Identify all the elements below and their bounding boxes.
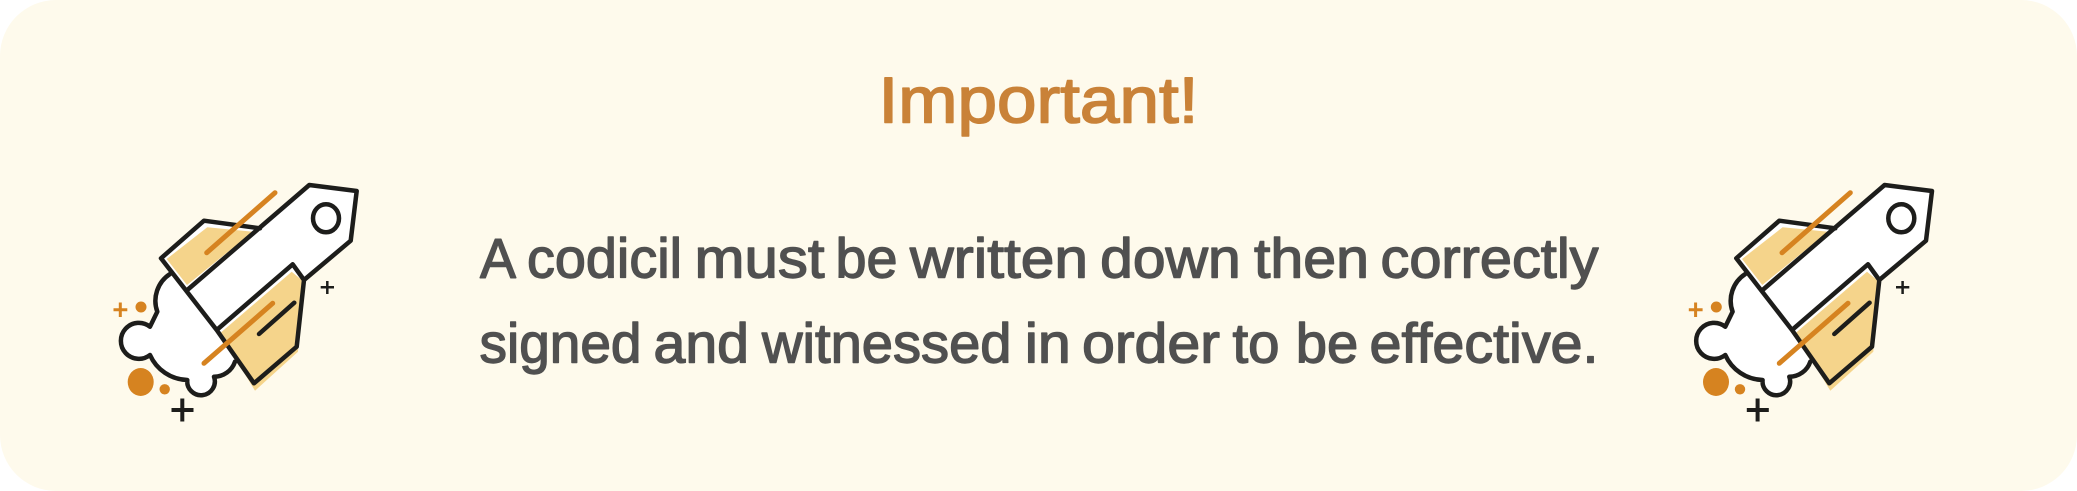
body text: be (1296, 312, 1358, 375)
body text: to (1232, 312, 1280, 375)
icon: right rocket (1689, 185, 1932, 422)
body text: effective. (1370, 312, 1598, 375)
body text: be (836, 227, 898, 290)
body text (480, 227, 1598, 375)
body text: must (694, 227, 825, 290)
body text: written (909, 227, 1088, 290)
body text: codicil (527, 227, 682, 290)
title: Important! (878, 64, 1198, 137)
body text: in (1025, 312, 1071, 375)
body text: correctly (1380, 227, 1598, 290)
icon: left rocket (114, 185, 357, 422)
body text: then (1254, 227, 1369, 290)
body text: A (480, 227, 517, 290)
body text: witnessed (761, 312, 1012, 375)
body text: order (1082, 312, 1220, 375)
body text: down (1100, 227, 1241, 290)
body text: signed (480, 312, 642, 375)
body text: and (654, 312, 749, 375)
